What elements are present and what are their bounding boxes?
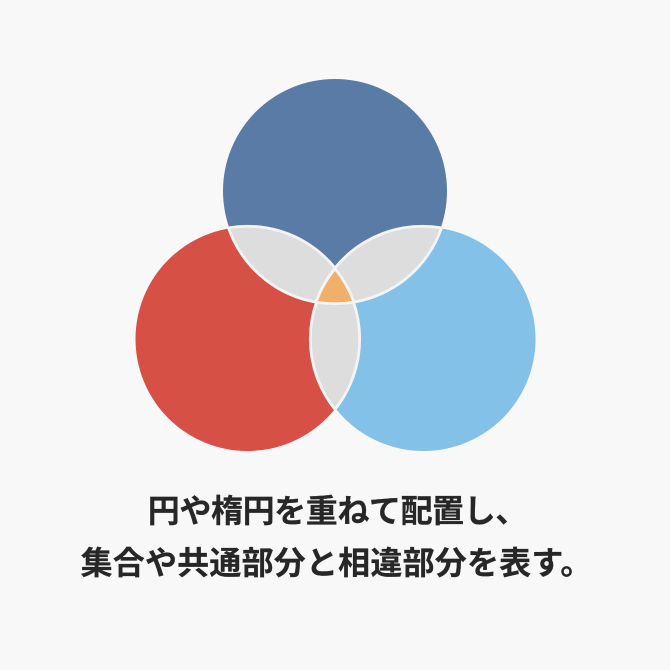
overlap: top and right	[316, 226, 442, 304]
circle: right light blue	[312, 227, 536, 451]
caption line 1: 円や楕円を重ねて配置し、	[148, 493, 527, 529]
circle: top dark blue	[223, 79, 447, 303]
overlap: center of all three	[316, 269, 354, 304]
overlap: top and left	[228, 226, 354, 304]
overlap: left and right	[310, 269, 360, 409]
circle: left red	[136, 227, 360, 451]
caption line 2: 集合や共通部分と相違部分を表す。	[81, 545, 593, 581]
